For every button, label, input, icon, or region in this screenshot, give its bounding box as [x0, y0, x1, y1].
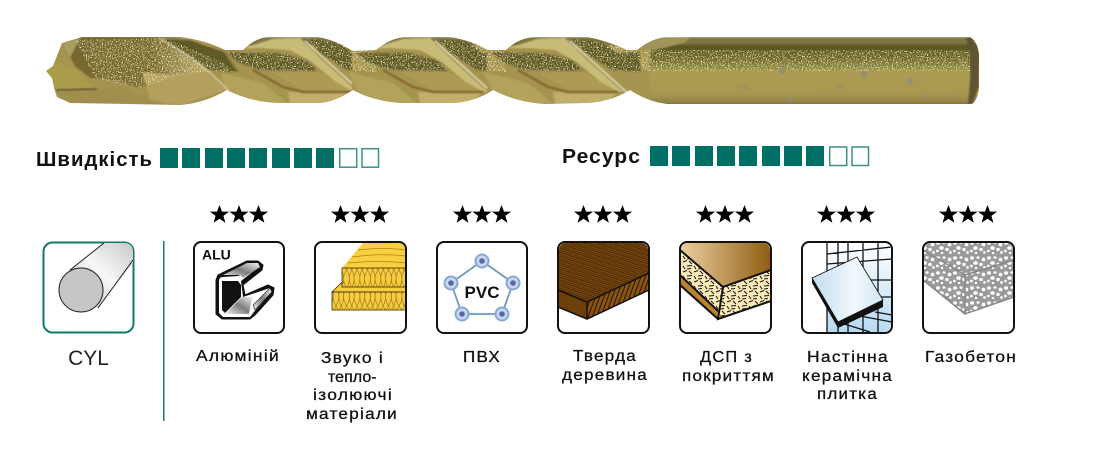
label: ПВХ	[463, 349, 501, 366]
speed rating squares	[160, 148, 378, 168]
label: ізолюючі	[313, 387, 393, 404]
icon: PVC molecule	[437, 242, 527, 333]
material: laminated chipboard	[680, 205, 775, 385]
stars	[331, 205, 389, 223]
divider	[163, 241, 164, 421]
icon: aluminium profile	[194, 242, 284, 333]
material: aluminium	[194, 205, 284, 365]
label: тепло-	[328, 369, 377, 386]
stars	[453, 205, 511, 223]
panel: shank type	[44, 242, 140, 370]
label	[562, 348, 648, 384]
label: Звуко і	[321, 350, 384, 367]
label: матеріали	[306, 406, 398, 423]
stars	[939, 205, 997, 223]
icon: hardwood board	[558, 242, 649, 333]
durability rating	[562, 146, 868, 168]
label	[306, 350, 398, 423]
label: керамічна	[802, 368, 893, 385]
speed rating	[36, 148, 378, 171]
material: hardwood	[558, 205, 649, 384]
stars	[210, 205, 268, 223]
icon: aerated concrete block	[923, 242, 1014, 333]
label	[802, 349, 893, 403]
material: insulation	[306, 205, 406, 423]
stars	[574, 205, 632, 223]
icon: cylindrical shank	[44, 242, 140, 332]
durability rating squares	[650, 146, 868, 166]
label: плитка	[817, 386, 878, 403]
speckle	[75, 38, 970, 88]
heading: durability: Ресурс	[562, 146, 641, 168]
icon: wall tile	[802, 242, 892, 333]
label: деревина	[562, 367, 648, 384]
icon: laminated chipboard	[680, 242, 771, 333]
icon: aluminium profile: ALU	[202, 246, 231, 262]
label: Алюміній	[196, 348, 280, 365]
icon: PVC molecule: PVC	[465, 283, 499, 302]
stars	[696, 205, 754, 223]
label: ДСП з	[700, 349, 753, 366]
label	[682, 349, 775, 385]
icon: insulation layers	[315, 242, 406, 333]
material: aerated concrete	[923, 205, 1017, 366]
label: Тверда	[573, 348, 637, 365]
material: wall tile	[802, 205, 893, 403]
stars	[817, 205, 875, 223]
heading: speed: Швидкість	[36, 149, 153, 171]
label: Настінна	[807, 349, 889, 366]
label: Газобетон	[925, 349, 1017, 366]
label: покриттям	[682, 368, 775, 385]
label: CYL: CYL	[68, 347, 109, 370]
material: PVC	[437, 205, 527, 366]
drill bit photo	[46, 37, 979, 105]
